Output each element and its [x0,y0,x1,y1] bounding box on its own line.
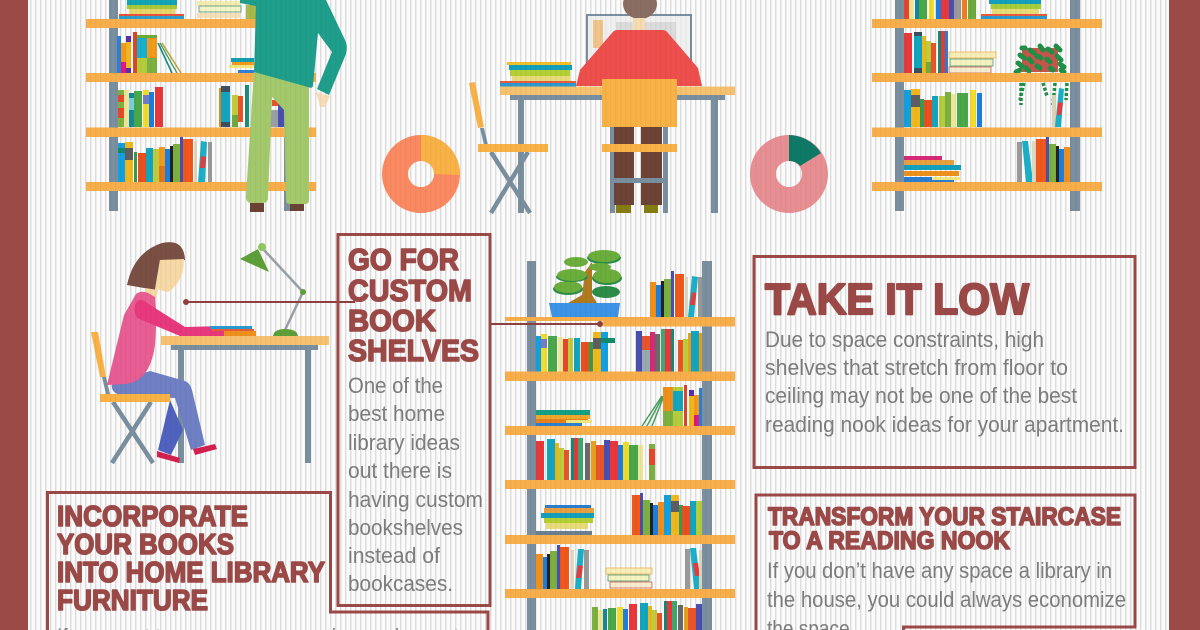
heading: go for custom book shelves: SHELVES [348,333,479,368]
chart: pink donut [763,135,821,200]
text: take it low body: shelves that stretch from floor to [765,355,1068,380]
heading: transform your staircase: TRANSFORM YOUR STAIRCASE [768,503,1121,531]
illustration: woman reading at desk with lamp [91,242,329,463]
text: custom shelves body: One of the [348,373,443,398]
heading: incorporate your books: YOUR BOOKS [57,529,234,561]
heading: go for custom book shelves [348,242,479,368]
connector: woman to custom shelves box [183,299,355,305]
text: staircase body [767,558,1126,630]
chart: orange donut [395,135,460,200]
heading: transform your staircase: TO A READING NOOK [769,527,1010,555]
heading: go for custom book shelves: GO FOR [348,242,459,277]
text: custom shelves body: best home [348,401,445,426]
connector: custom shelves box to center shelf [491,321,603,327]
panel: transform your staircase [756,495,1135,630]
illustration: standing man in teal sweater [240,0,347,212]
maroon side border right [1169,0,1200,630]
heading: incorporate your books [57,501,325,617]
text: staircase body: If you don’t have any space a library in [767,558,1112,583]
text: take it low body: Due to space constraints, high [765,327,1044,352]
illustration: person at desk seen from behind [500,0,735,213]
text: take it low body: reading nook ideas for your apartment. [765,412,1124,437]
maroon side border left [0,0,28,630]
text: custom shelves body: out there is [348,458,452,483]
heading: take it low: TAKE IT LOW [765,275,1029,324]
text: custom shelves body: library ideas [348,430,460,455]
text: custom shelves body [348,373,483,596]
heading: transform your staircase [768,503,1121,555]
heading: go for custom book shelves: CUSTOM [348,273,472,308]
illustration: empty folding chair [469,82,548,213]
panel: go for custom book shelves [338,234,490,606]
heading: incorporate your books: INCORPORATE [57,501,248,533]
illustration: top-right bookshelf with books and plant [872,0,1102,211]
panel: incorporate your books [48,492,488,630]
text: custom shelves body: bookcases. [348,571,453,596]
text: custom shelves body: instead of [348,543,441,568]
text: staircase body: the house, you could always economize [767,587,1126,612]
panel: take it low [754,256,1135,468]
text: take it low body: ceiling may not be one of the best [765,383,1078,408]
text: custom shelves body: bookshelves [348,515,463,540]
heading: incorporate your books: FURNITURE [57,585,208,617]
text: custom shelves body: having custom [348,487,483,512]
illustration: top-left bookshelf with books [86,0,316,211]
illustration: center tall bookshelf with bonsai [505,250,735,630]
heading: go for custom book shelves: BOOK [348,303,437,338]
text: take it low body [765,327,1124,437]
heading: incorporate your books: INTO HOME LIBRARY [57,557,325,589]
